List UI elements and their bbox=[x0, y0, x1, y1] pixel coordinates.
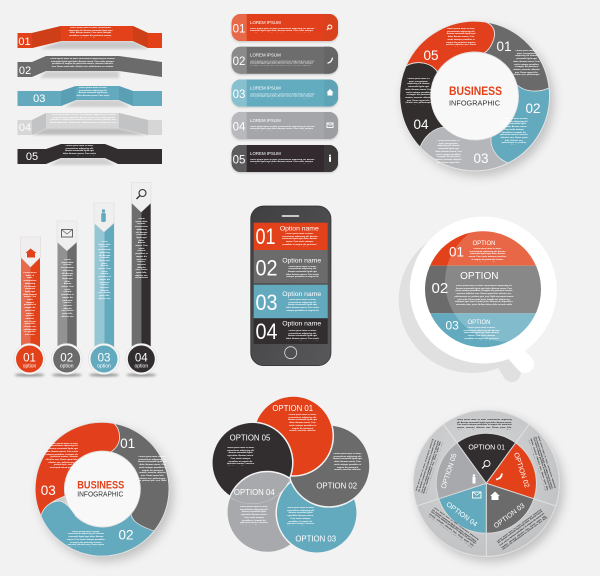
bar 03 bbox=[94, 203, 114, 347]
pill 03: LOREM IPSUM bbox=[250, 86, 281, 90]
ribbon 05 bbox=[18, 144, 162, 165]
ring numbers: 05 bbox=[423, 48, 439, 63]
panel: five overlapping circles bbox=[212, 396, 370, 553]
magnifier shadow bbox=[399, 227, 545, 373]
panel: segmented wheel bbox=[413, 410, 559, 556]
option labels: OPTION 02 bbox=[316, 481, 357, 490]
pill 05: 05 bbox=[233, 154, 245, 166]
bar 04 bbox=[132, 183, 151, 347]
phone option labels: Option name bbox=[280, 226, 319, 233]
phone text blocks bbox=[282, 233, 320, 341]
wedge icons bbox=[472, 460, 502, 500]
phone option labels bbox=[280, 226, 321, 328]
ring numbers: 04 bbox=[413, 117, 429, 132]
phone numbers bbox=[256, 224, 278, 344]
lens labels: 03 bbox=[446, 318, 459, 332]
pill 02: LOREM IPSUM bbox=[250, 53, 281, 58]
pill 02 bbox=[232, 47, 338, 74]
panel: vertical bars bbox=[14, 183, 157, 376]
ring numbers: 03 bbox=[41, 483, 56, 498]
interlocked petals bbox=[212, 396, 370, 553]
panel: magnifier chart bbox=[399, 216, 565, 373]
lens labels bbox=[432, 241, 498, 332]
ring title: BUSINESS bbox=[449, 86, 502, 98]
option labels: OPTION 04 bbox=[234, 488, 275, 497]
option labels: OPTION 01 bbox=[272, 404, 313, 413]
option labels bbox=[230, 404, 357, 544]
ribbon 01 bbox=[18, 26, 162, 49]
phone home button bbox=[285, 347, 297, 359]
phone option labels: Option name bbox=[282, 291, 321, 298]
wedge labels: OPTION 05 bbox=[441, 453, 459, 490]
phone numbers: 01 bbox=[256, 224, 276, 249]
wedge labels: OPTION 03 bbox=[493, 502, 526, 530]
lens text blocks bbox=[453, 248, 515, 340]
ribbon 03 bbox=[18, 86, 162, 107]
bar badges: 03 bbox=[98, 352, 110, 364]
wheel wedges bbox=[436, 433, 536, 533]
wedge labels: OPTION 04 bbox=[445, 501, 478, 528]
ring numbers: 03 bbox=[473, 151, 489, 166]
outer text blocks bbox=[416, 419, 556, 550]
pill 05: LOREM IPSUM bbox=[250, 151, 281, 156]
ribbon 03: 03 bbox=[33, 93, 45, 105]
pill 01: 01 bbox=[233, 24, 245, 36]
wedge labels bbox=[441, 444, 530, 530]
option labels: OPTION 03 bbox=[295, 535, 336, 544]
phone screen bands bbox=[254, 223, 328, 344]
bar badges bbox=[14, 344, 157, 376]
pill 03 bbox=[232, 80, 338, 106]
bar badges: 04 bbox=[135, 352, 148, 364]
ribbon 01: 01 bbox=[18, 36, 31, 48]
ring text blocks bbox=[45, 443, 167, 547]
bar badges: option bbox=[60, 364, 74, 370]
lens labels: OPTION bbox=[467, 320, 491, 326]
bar badges: option bbox=[97, 364, 111, 370]
wedge labels: OPTION 01 bbox=[468, 444, 505, 451]
lens labels: OPTION bbox=[460, 271, 498, 282]
panel: smartphone bbox=[251, 206, 331, 366]
ribbon 04: 04 bbox=[19, 122, 31, 134]
lens labels: OPTION bbox=[472, 241, 496, 247]
magnifier white body bbox=[410, 216, 557, 364]
panel: five-part business ring bbox=[400, 21, 549, 171]
bar badges: 02 bbox=[60, 352, 73, 364]
phone numbers: 03 bbox=[256, 290, 278, 315]
ring numbers bbox=[413, 39, 541, 166]
bar badges: option bbox=[134, 364, 148, 370]
panel: pill list bbox=[232, 14, 338, 172]
ring hole bbox=[431, 52, 518, 140]
pill 01: LOREM IPSUM bbox=[250, 20, 281, 25]
ring title: INFOGRAPHIC bbox=[449, 98, 501, 107]
wheel base bbox=[413, 410, 559, 556]
ribbon 05: 05 bbox=[26, 151, 38, 163]
lens labels: 02 bbox=[432, 280, 448, 297]
bar badges: option bbox=[23, 364, 37, 370]
ribbon 02: 02 bbox=[19, 65, 31, 77]
petal text blocks bbox=[226, 414, 362, 526]
pill 03: 03 bbox=[233, 89, 245, 101]
ring title: BUSINESS bbox=[77, 479, 124, 491]
ring title bbox=[77, 479, 124, 499]
panel: three-part business ring bbox=[35, 422, 169, 556]
phone speaker bbox=[282, 215, 299, 217]
phone numbers: 02 bbox=[256, 256, 278, 280]
panel: folded ribbons bbox=[18, 26, 162, 165]
lens bands bbox=[425, 231, 541, 348]
pill 04: 04 bbox=[233, 122, 246, 134]
bar 01 bbox=[20, 237, 40, 347]
pill 02: 02 bbox=[233, 56, 245, 68]
pill 04: LOREM IPSUM bbox=[250, 118, 281, 123]
phone option labels: Option name bbox=[282, 321, 321, 328]
ring segments bbox=[35, 422, 169, 556]
pill 04 bbox=[232, 112, 338, 139]
ring numbers: 02 bbox=[525, 101, 541, 116]
ring title bbox=[449, 86, 502, 107]
wheel dividers bbox=[417, 424, 556, 556]
bar 02 bbox=[57, 221, 77, 347]
bar badges: 01 bbox=[23, 352, 36, 364]
ring text blocks: Lorem ipsum dolor sit amet, consectetuer adipiscing elit. Aenean commodo ligula eget dolor. Aenean massa. Cum sociis natoque penatibus et magnis dis parturient montes, nascetur ridiculus mus. Donec quam felis, ultricies nec, pellentesque eu, pretium quis, sem. Nulla consequat massa quis enim. bbox=[45, 443, 78, 469]
ring text blocks bbox=[405, 28, 540, 164]
ring numbers bbox=[41, 436, 135, 542]
ring title: INFOGRAPHIC bbox=[77, 492, 123, 499]
pill 05 bbox=[232, 145, 338, 172]
ring numbers: 01 bbox=[120, 436, 135, 451]
ring numbers: 01 bbox=[496, 39, 512, 54]
ring hole bbox=[65, 452, 140, 526]
pill 01 bbox=[232, 14, 338, 41]
phone option labels: Option name bbox=[282, 258, 321, 265]
ribbon 04 bbox=[18, 113, 162, 135]
phone body bbox=[251, 206, 331, 366]
lens labels: 01 bbox=[449, 245, 464, 260]
ring numbers: 02 bbox=[118, 527, 134, 542]
option labels: OPTION 05 bbox=[230, 434, 271, 443]
ring segments bbox=[400, 21, 549, 171]
phone numbers: 04 bbox=[256, 319, 278, 344]
wedge labels: OPTION 02 bbox=[512, 452, 530, 489]
ribbon 02 bbox=[18, 56, 162, 78]
